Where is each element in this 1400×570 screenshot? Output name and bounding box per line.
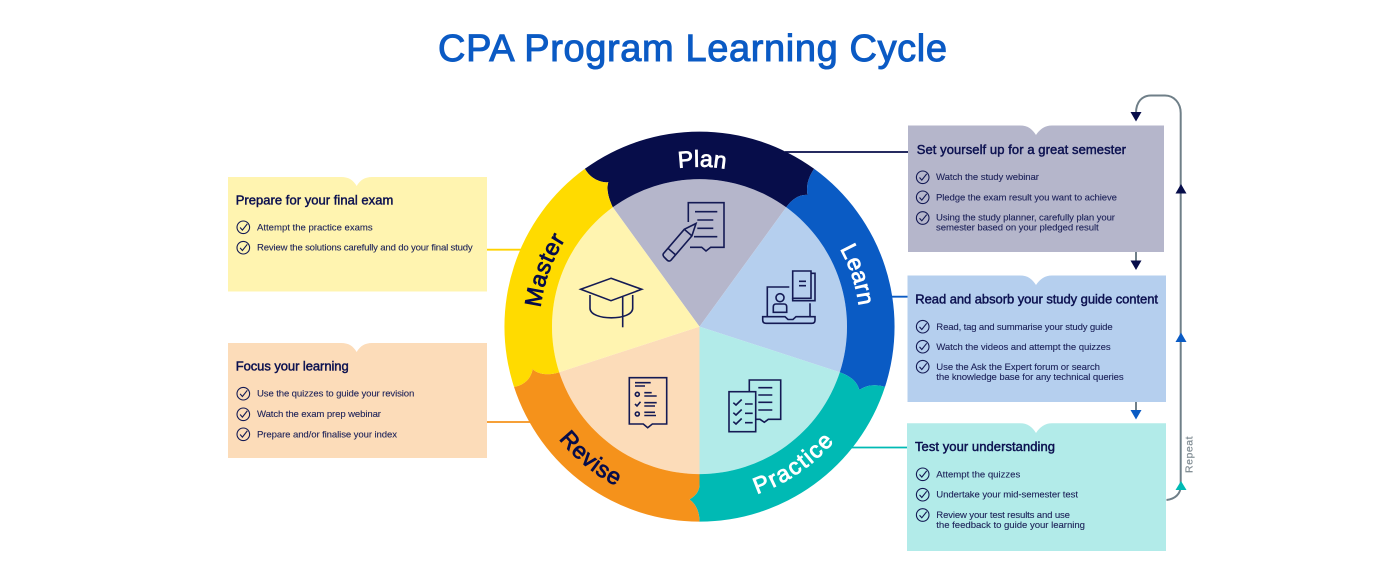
- checklist item: Watch the videos and attempt the quizzes: [936, 342, 1111, 353]
- wedge: Learn: [700, 207, 847, 372]
- checklist item: Watch the study webinar: [936, 172, 1040, 183]
- band label: Plan: Plan: [678, 150, 726, 169]
- panel: Master: [228, 177, 487, 292]
- icon: checklist and document: [729, 380, 781, 432]
- band label: Revise: Revise: [559, 430, 620, 484]
- connector: Plan to panel: [785, 151, 908, 153]
- checklist item: semester based on your pledged result: [936, 223, 1099, 234]
- checklist item: the knowledge base for any technical queries: [936, 372, 1124, 383]
- checklist item: Read, tag and summarise your study guide: [936, 322, 1113, 333]
- checklist item: Pledge the exam result you want to achieve: [936, 192, 1117, 203]
- connector: Learn to panel: [888, 296, 908, 298]
- panel: Learn: [908, 276, 1166, 402]
- cycle wheel: [504, 132, 895, 522]
- panel: Practice: [907, 423, 1166, 551]
- band: Learn: [786, 169, 895, 390]
- icon: graduation cap: [581, 278, 642, 327]
- band: Practice: [690, 372, 885, 522]
- checklist item: Using the study planner, carefully plan your: [936, 213, 1116, 224]
- panel heading: Plan: Set yourself up for a great semester: [917, 142, 1127, 157]
- arrow: repeat loop: [1130, 96, 1186, 500]
- icon: document and pencil: [663, 203, 724, 261]
- band label: Practice: Practice: [752, 436, 832, 494]
- panel heading: Practice: Test your understanding: [915, 439, 1055, 454]
- checklist item: Watch the exam prep webinar: [257, 409, 382, 420]
- title: CPA Program Learning Cycle: [438, 28, 947, 70]
- band label: Master: Master: [524, 232, 564, 306]
- band: Revise: [514, 369, 700, 522]
- panel heading: Master: Prepare for your final exam: [236, 192, 393, 207]
- band: Master: [504, 169, 613, 387]
- icon: exam paper: [629, 378, 667, 428]
- wedge: Practice: [700, 327, 840, 474]
- icon: laptop and book: [763, 271, 815, 323]
- wedge: Plan: [613, 179, 786, 327]
- checklist item: Attempt the quizzes: [936, 469, 1021, 480]
- panel: Revise: [228, 343, 487, 458]
- checklist item: Use the quizzes to guide your revision: [257, 389, 414, 400]
- checklist item: [916, 360, 1124, 383]
- label: Repeat: Repeat: [1184, 436, 1196, 473]
- checklist item: Use the Ask the Expert forum or search: [936, 362, 1100, 373]
- wedge: Revise: [559, 327, 700, 474]
- checklist item: Prepare and/or finalise your index: [257, 429, 397, 440]
- checklist item: [916, 212, 1116, 234]
- panel: Plan: [908, 126, 1164, 252]
- checklist item: Undertake your mid-semester test: [936, 490, 1078, 501]
- connector: Practice to panel: [850, 446, 908, 448]
- checklist item: [916, 509, 1085, 531]
- arrow: Learn to Practice: [1130, 402, 1142, 420]
- checklist item: the feedback to guide your learning: [936, 520, 1085, 531]
- wedge: Master: [552, 207, 700, 372]
- checklist item: Review the solutions carefully and do your final study: [257, 243, 473, 254]
- band: Plan: [585, 132, 814, 207]
- checklist item: Review your test results and use: [936, 510, 1070, 521]
- arrow: Plan to Learn: [1130, 252, 1142, 270]
- checklist item: Attempt the practice exams: [257, 222, 373, 233]
- panel heading: Revise: Focus your learning: [236, 358, 349, 373]
- connector: Master to panel: [487, 249, 524, 251]
- connector: Revise to panel: [487, 421, 532, 423]
- panel heading: Learn: Read and absorb your study guide content: [915, 291, 1158, 306]
- band label: Learn: Learn: [840, 242, 871, 305]
